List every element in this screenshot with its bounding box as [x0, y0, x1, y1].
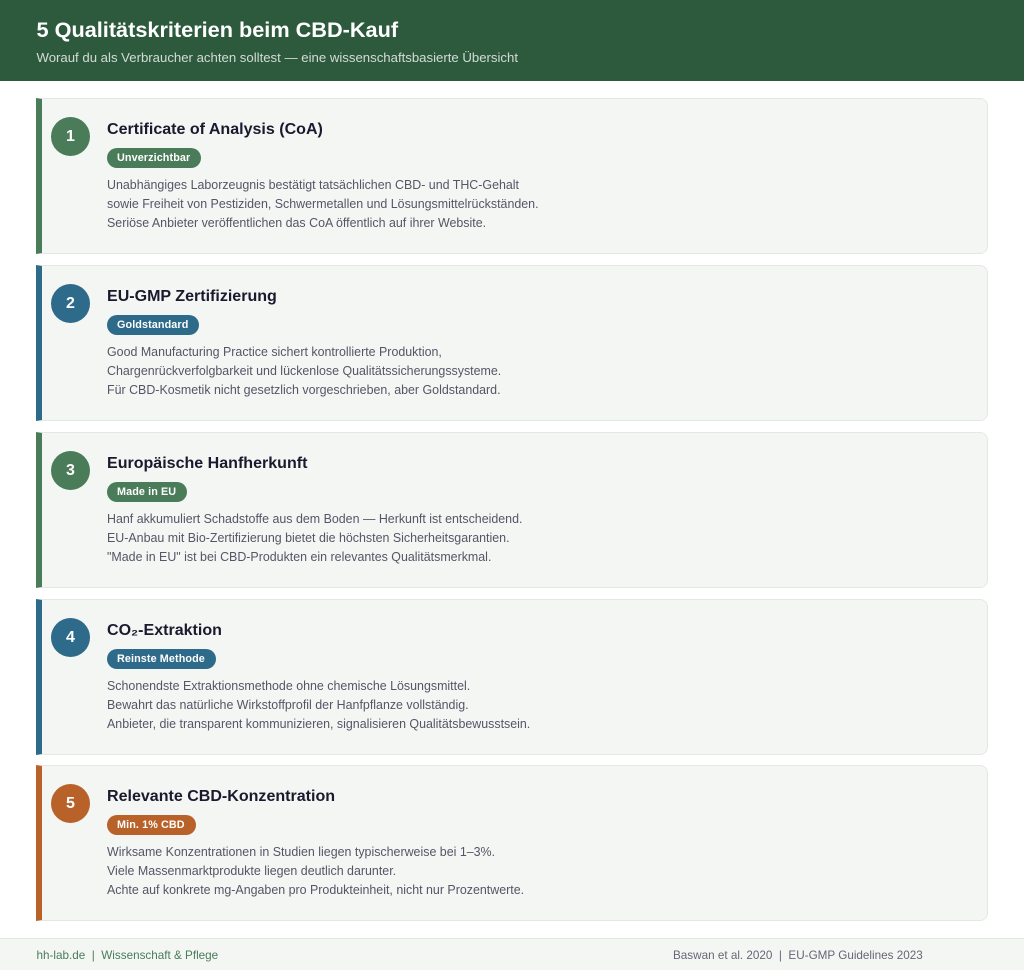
number badge 4: 4: [66, 629, 75, 646]
description: criterion 2: Für CBD-Kosmetik nicht gesetzlich vorgeschrieben, aber Goldstandard.: [107, 383, 501, 397]
panel: criterion 2 EU-GMP: [36, 265, 988, 421]
description: criterion 2: [107, 345, 501, 397]
tag: Min. 1% CBD: [107, 815, 196, 835]
heading: EU-GMP Zertifizierung: EU-GMP Zertifizierung: [107, 287, 277, 305]
tag: Unverzichtbar: [107, 148, 201, 168]
heading: CO2-Extraktion: CO₂-Extraktion: [107, 621, 222, 639]
heading: Relevante CBD-Konzentration: Relevante CBD-Konzentration: [107, 787, 335, 805]
panel: criterion 5 CBD-Konzentration: [36, 765, 988, 921]
number badge 5: 5: [66, 795, 75, 812]
tag: Unverzichtbar: Unverzichtbar: [117, 152, 190, 164]
description: criterion 5: Viele Massenmarktprodukte liegen deutlich darunter.: [107, 864, 396, 878]
subtitle: Worauf du als Verbraucher achten solltest — eine wissenschaftsbasierte Übersicht: [36, 50, 518, 65]
header banner: [0, 0, 1024, 81]
description: criterion 5: [107, 845, 524, 897]
description: criterion 1: Unabhängiges Laborzeugnis bestätigt tatsächlichen CBD- und THC-Gehalt: [107, 178, 519, 192]
number badge 5: [51, 784, 90, 823]
number badge 2: [51, 284, 90, 323]
description: criterion 3: "Made in EU" ist bei CBD-Produkten ein relevantes Qualitätsmerkmal.: [107, 550, 491, 564]
description: criterion 4: Anbieter, die transparent kommunizieren, signalisieren Qualitätsbewusstsein.: [107, 717, 530, 731]
panel: criterion 3 Hanfherkunft: [36, 432, 988, 588]
panel: criterion 1 Certificate of Analysis: [36, 98, 988, 254]
title: 5 Qualitätskriterien beim CBD-Kauf: [36, 17, 398, 42]
number badge 1: [51, 117, 90, 156]
heading: Certificate of Analysis: Certificate of Analysis (CoA): [107, 120, 323, 138]
description: criterion 4: Schonendste Extraktionsmethode ohne chemische Lösungsmittel.: [107, 679, 470, 693]
footer bar: [0, 938, 1024, 970]
number badge 3: 3: [66, 462, 75, 479]
number badge 1: 1: [66, 128, 75, 145]
description: criterion 5: Achte auf konkrete mg-Angaben pro Produkteinheit, nicht nur Prozentwerte.: [107, 883, 524, 897]
panel: criterion 4 CO2-Extraktion: [36, 599, 988, 755]
heading: Europäische Hanfherkunft: Europäische Hanfherkunft: [107, 454, 307, 472]
description: criterion 2: Good Manufacturing Practice sichert kontrollierte Produktion,: [107, 345, 442, 359]
description: criterion 4: Bewahrt das natürliche Wirkstoffprofil der Hanfpflanze vollständig.: [107, 698, 469, 712]
footer brand text: hh-lab.de | Wissenschaft & Pflege: [36, 949, 218, 962]
footer sources: Baswan et al. 2020 | EU-GMP Guidelines 2023: [673, 949, 923, 962]
number badge 3: [51, 451, 90, 490]
tag: Made in EU: Made in EU: [117, 486, 176, 498]
tag: Reinste Methode: [107, 649, 216, 669]
number badge 4: [51, 618, 90, 657]
description: criterion 3: Hanf akkumuliert Schadstoffe aus dem Boden — Herkunft ist entscheidend.: [107, 512, 522, 526]
tag: Goldstandard: Goldstandard: [117, 319, 188, 331]
description: criterion 2: Chargenrückverfolgbarkeit und lückenlose Qualitätssicherungssysteme.: [107, 364, 501, 378]
tag: Min. 1% CBD: Min. 1% CBD: [117, 819, 185, 831]
description: criterion 1: Seriöse Anbieter veröffentlichen das CoA öffentlich auf ihrer Website.: [107, 216, 486, 230]
description: criterion 3: [107, 512, 522, 564]
tag: Goldstandard: [107, 315, 199, 335]
description: criterion 1: [107, 178, 539, 230]
tag: Made in EU: [107, 482, 187, 502]
description: criterion 4: [107, 679, 530, 731]
description: criterion 3: EU-Anbau mit Bio-Zertifizierung bietet die höchsten Sicherheitsgarantien.: [107, 531, 510, 545]
description: criterion 1: sowie Freiheit von Pestiziden, Schwermetallen und Lösungsmittelrückständen.: [107, 197, 539, 211]
description: criterion 5: Wirksame Konzentrationen in Studien liegen typischerweise bei 1–3%.: [107, 845, 495, 859]
tag: Reinste Methode: Reinste Methode: [117, 653, 205, 665]
number badge 2: 2: [66, 295, 75, 312]
